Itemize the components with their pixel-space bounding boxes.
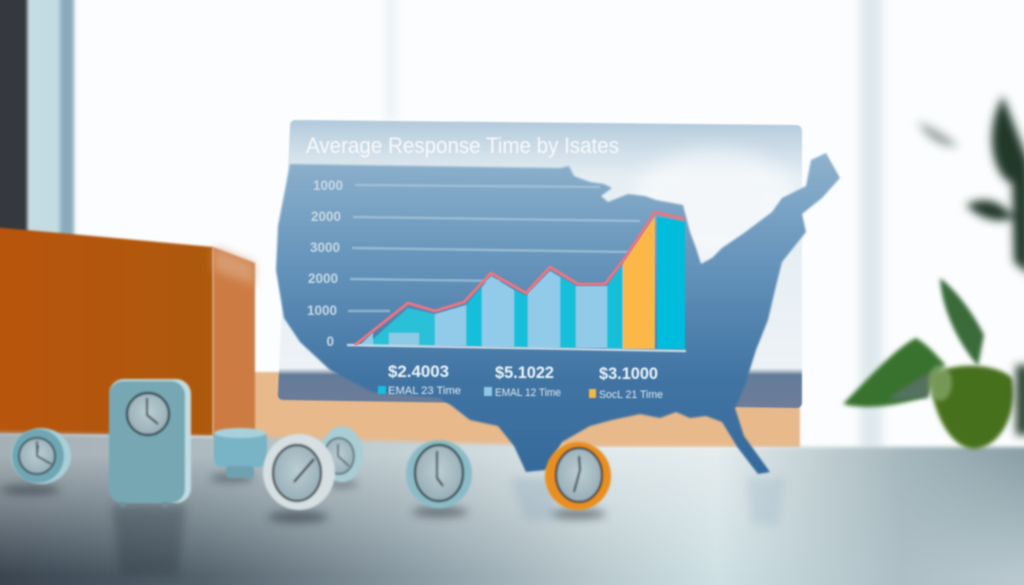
map of the United States bbox=[276, 153, 840, 474]
backdrop: pale orange wall band behind panel bbox=[250, 372, 800, 448]
clock 3: teal cylinder stand bbox=[214, 428, 267, 478]
orange box on the left bbox=[0, 226, 255, 438]
y axis labels: 1000 bbox=[307, 303, 337, 318]
large left leaf bbox=[843, 338, 945, 407]
background blurred leaves bbox=[918, 96, 1024, 275]
tall cyan bar bbox=[657, 217, 685, 349]
clock 4: rear teal clock bbox=[321, 426, 363, 482]
orange box side bbox=[213, 247, 255, 438]
orange bar bbox=[623, 216, 655, 349]
x axis bbox=[347, 345, 686, 351]
orange box front bbox=[0, 226, 213, 436]
soft mullion bbox=[386, 0, 396, 120]
chart contents on the panel bbox=[306, 133, 686, 401]
dark window frame at left bbox=[0, 0, 29, 250]
light blue and cyan bars bbox=[435, 305, 466, 346]
title: Average Response Time by Isates bbox=[306, 133, 619, 158]
pot highlight bbox=[928, 365, 952, 401]
stat value 1: $2.4003 bbox=[388, 362, 449, 381]
y axis labels: 1000 bbox=[313, 178, 343, 193]
y axis labels: 2000 bbox=[308, 271, 338, 286]
clock 1: small teal round clock bbox=[11, 428, 71, 484]
clock 2: tall teal rounded clock bbox=[109, 379, 191, 507]
cyan area first segment bbox=[373, 308, 435, 346]
bar and area chart bbox=[360, 216, 685, 349]
front upper leaf bbox=[940, 278, 984, 366]
panel glass bbox=[278, 120, 802, 408]
y axis labels: 2000 bbox=[311, 209, 341, 224]
clock 6: teal clock bbox=[406, 440, 472, 508]
dark stem area bbox=[1016, 365, 1024, 435]
trend line bbox=[355, 212, 685, 345]
clock shadows on the table bbox=[0, 474, 785, 575]
pale inset bar bbox=[389, 333, 419, 346]
y axis labels: 3000 bbox=[310, 240, 340, 255]
white haze in the upper right of the panel bbox=[630, 150, 800, 260]
stat value 3: $3.1000 bbox=[599, 364, 658, 383]
legend item 1: EMAL 23 Time bbox=[388, 385, 461, 397]
y axis labels: 0 bbox=[326, 334, 334, 349]
stat value 2: $5.1022 bbox=[495, 363, 554, 382]
right window column bbox=[860, 0, 882, 450]
legend item 3: SocL 21 Time bbox=[599, 389, 663, 401]
y axis labels bbox=[307, 178, 343, 349]
clock 7: orange clock bbox=[545, 442, 611, 510]
grid lines bbox=[348, 185, 640, 311]
leaf shade bbox=[888, 370, 935, 400]
green pot bbox=[930, 366, 1013, 449]
pale blue window column bbox=[28, 0, 68, 250]
darker foreground of the table bbox=[0, 464, 1024, 585]
clock 5: white clock bbox=[263, 434, 335, 510]
pale side highlight at the top of the box side bbox=[214, 247, 254, 285]
translucent dashboard panel bbox=[278, 120, 802, 408]
legend item 2: EMAL 12 Time bbox=[495, 387, 561, 399]
potted plant bbox=[843, 96, 1024, 449]
table surface bbox=[0, 420, 1024, 585]
